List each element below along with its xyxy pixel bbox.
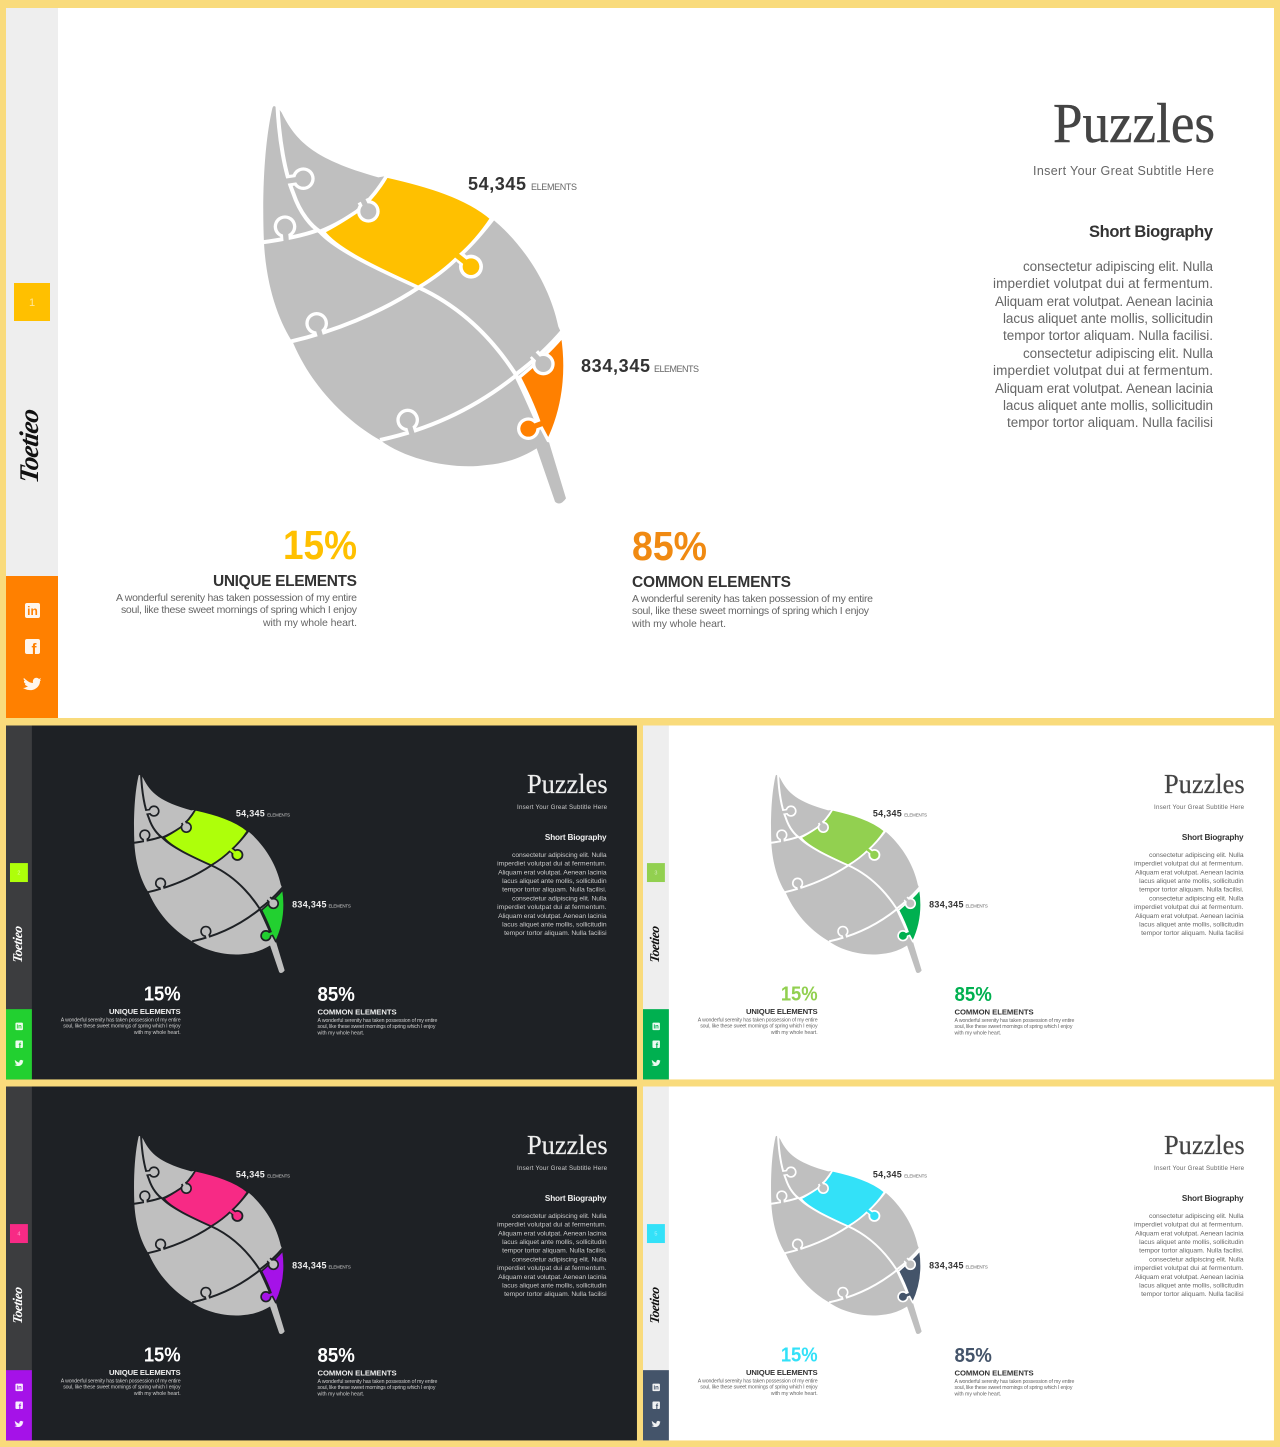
sidebar <box>643 1087 669 1440</box>
leaf piece: highlighted top <box>323 176 492 287</box>
label: 54,345 elements: 54,345 <box>236 809 265 819</box>
biography text: imperdiet volutpat dui at fermentum. <box>1134 1265 1244 1272</box>
social icons: in <box>654 1386 659 1392</box>
biography heading: Short Biography <box>1182 833 1244 842</box>
leaf piece: highlighted right <box>897 890 921 942</box>
stat: 15% unique elements: 15% <box>781 984 818 1006</box>
biography text: lacus aliquet ante mollis, sollicitudin <box>502 1239 607 1246</box>
label: 834,345 elements: 834,345 <box>581 356 650 376</box>
biography text: tempor tortor aliquam. Nulla facilisi. <box>502 886 607 894</box>
stat: 15% unique elements <box>61 984 181 1036</box>
leaf piece: highlighted top <box>164 1171 248 1226</box>
biography text: Aliquam erat volutpat. Aenean lacinia <box>995 381 1213 396</box>
sidebar: 1 <box>29 297 35 309</box>
biography text: lacus aliquet ante mollis, sollicitudin <box>502 878 607 885</box>
slide 3: white light green <box>643 726 1274 1079</box>
social icons: f <box>32 641 38 658</box>
stat: 85% common elements: with my whole heart. <box>631 618 726 630</box>
subtitle: Insert Your Great Subtitle Here <box>1154 1165 1245 1172</box>
biography text <box>1134 1213 1244 1298</box>
stat: 85% common elements: with my whole heart. <box>954 1392 1001 1398</box>
sidebar: Toetieo <box>647 1285 662 1325</box>
stat: 85% common elements: with my whole heart. <box>317 1031 364 1037</box>
stat: 15% unique elements: A wonderful serenity has taken possession of my entire <box>116 592 357 604</box>
social icons <box>651 1384 660 1427</box>
label: 834,345 elements: ELEMENTS <box>654 364 699 374</box>
biography text: Aliquam erat volutpat. Aenean lacinia <box>995 294 1213 309</box>
stat: 85% common elements: COMMON ELEMENTS <box>954 1369 1034 1378</box>
label: 834,345 elements <box>292 1260 351 1270</box>
title: Puzzles <box>527 769 608 800</box>
stat: 85% common elements: A wonderful serenity has taken possession of my entire <box>632 593 873 605</box>
stat: 15% unique elements: with my whole heart. <box>262 617 357 629</box>
biography text: consectetur adipiscing elit. Nulla <box>512 852 607 859</box>
subtitle: Insert Your Great Subtitle Here <box>517 804 608 811</box>
biography text: imperdiet volutpat dui at fermentum. <box>497 904 607 911</box>
slide 1: main yellow and orange slide <box>6 8 1274 718</box>
biography text: Aliquam erat volutpat. Aenean lacinia <box>498 870 607 877</box>
label: 54,345 elements: ELEMENTS <box>904 1174 927 1179</box>
biography text <box>497 1213 607 1298</box>
stat: 85% common elements: COMMON ELEMENTS <box>317 1008 397 1017</box>
stat: 15% unique elements: with my whole heart. <box>771 1030 818 1036</box>
title: Puzzles <box>1164 1130 1245 1161</box>
biography text: Aliquam erat volutpat. Aenean lacinia <box>1135 870 1244 877</box>
stat: 85% common elements: 85% <box>317 1345 355 1367</box>
label: 834,345 elements <box>292 899 351 909</box>
biography text: tempor tortor aliquam. Nulla facilisi <box>1141 1291 1244 1298</box>
stat: 85% common elements: COMMON ELEMENTS <box>317 1369 397 1378</box>
social icons: in <box>17 1386 22 1392</box>
stat: 85% common elements: with my whole heart. <box>317 1392 364 1398</box>
social icons: in <box>17 1025 22 1031</box>
biography text: Aliquam erat volutpat. Aenean lacinia <box>1135 913 1244 920</box>
subtitle: Insert Your Great Subtitle Here <box>1033 164 1214 178</box>
sidebar: 2 <box>17 871 20 877</box>
label: 54,345 elements: 54,345 <box>236 1170 265 1180</box>
subtitle: Insert Your Great Subtitle Here <box>517 1165 608 1172</box>
stat: 15% unique elements: 15% <box>144 984 181 1006</box>
label: 834,345 elements: 834,345 <box>292 1260 326 1270</box>
biography text <box>497 852 607 937</box>
biography text: tempor tortor aliquam. Nulla facilisi. <box>1003 328 1213 343</box>
biography text: tempor tortor aliquam. Nulla facilisi. <box>1139 1247 1244 1255</box>
label: 54,345 elements: ELEMENTS <box>904 813 927 818</box>
leaf piece: highlighted right <box>260 890 284 942</box>
label: 54,345 elements: ELEMENTS <box>267 813 290 818</box>
biography text: lacus aliquet ante mollis, sollicitudin <box>1139 921 1244 928</box>
label: 54,345 elements <box>236 809 290 819</box>
biography text: consectetur adipiscing elit. Nulla <box>1149 852 1244 859</box>
label: 834,345 elements: ELEMENTS <box>965 1264 988 1269</box>
social icons: in <box>654 1025 659 1031</box>
biography heading: Short Biography <box>545 833 607 842</box>
label: 54,345 elements: 54,345 <box>873 1170 902 1180</box>
biography text: consectetur adipiscing elit. Nulla <box>1149 1213 1244 1220</box>
stat: 15% unique elements: soul, like these sweet mornings of spring which I enjoy <box>700 1385 818 1391</box>
biography text: Aliquam erat volutpat. Aenean lacinia <box>498 1274 607 1281</box>
stat: 85% common elements: A wonderful serenity has taken possession of my entire <box>954 1018 1075 1024</box>
stat: 85% common elements: A wonderful serenity has taken possession of my entire <box>317 1018 438 1024</box>
biography text: Aliquam erat volutpat. Aenean lacinia <box>498 913 607 920</box>
stat: 15% unique elements: soul, like these sweet mornings of spring which I enjoy <box>63 1024 181 1030</box>
stat: 85% common elements: A wonderful serenity has taken possession of my entire <box>317 1379 438 1385</box>
stat: 15% unique elements: UNIQUE ELEMENTS <box>746 1368 818 1377</box>
stat: 85% common elements: soul, like these sweet mornings of spring which I enjoy <box>317 1385 436 1391</box>
sidebar: 4 <box>17 1232 20 1238</box>
social icons <box>23 603 41 690</box>
stat: 15% unique elements: A wonderful serenity has taken possession of my entire <box>61 1018 181 1024</box>
biography text: consectetur adipiscing elit. Nulla <box>512 1213 607 1220</box>
slide 2: dark lime and green <box>6 726 637 1079</box>
social icons: f <box>19 1402 22 1411</box>
biography text: lacus aliquet ante mollis, sollicitudin <box>502 1282 607 1289</box>
biography heading: Short Biography <box>1182 1194 1244 1203</box>
stat: 15% unique elements: 15% <box>283 522 357 568</box>
biography text: tempor tortor aliquam. Nulla facilisi <box>1141 930 1244 937</box>
biography text: lacus aliquet ante mollis, sollicitudin <box>502 921 607 928</box>
leaf puzzle base <box>132 774 285 973</box>
biography text: consectetur adipiscing elit. Nulla <box>512 895 607 902</box>
biography text: tempor tortor aliquam. Nulla facilisi. <box>1139 886 1244 894</box>
stat: 85% common elements: soul, like these sweet mornings of spring which I enjoy <box>317 1024 436 1030</box>
label: 54,345 elements <box>873 1170 927 1180</box>
leaf puzzle base <box>260 103 566 504</box>
label: 54,345 elements: ELEMENTS <box>267 1174 290 1179</box>
label: 834,345 elements: 834,345 <box>929 1260 963 1270</box>
stat: 85% common elements <box>954 1345 1075 1398</box>
stat: 15% unique elements: 15% <box>144 1345 181 1367</box>
stat: 85% common elements: 85% <box>954 984 992 1006</box>
stat: 15% unique elements: 15% <box>781 1345 818 1367</box>
biography text: tempor tortor aliquam. Nulla facilisi <box>504 930 607 937</box>
biography text: imperdiet volutpat dui at fermentum. <box>1134 861 1244 868</box>
label: 834,345 elements: 834,345 <box>929 899 963 909</box>
biography text: Aliquam erat volutpat. Aenean lacinia <box>1135 1231 1244 1238</box>
biography text <box>993 259 1213 430</box>
leaf piece: highlighted right <box>897 1251 921 1303</box>
stat: 85% common elements <box>317 984 438 1037</box>
biography text: imperdiet volutpat dui at fermentum. <box>497 1222 607 1229</box>
biography text: Aliquam erat volutpat. Aenean lacinia <box>498 1231 607 1238</box>
leaf puzzle base <box>132 1135 285 1334</box>
label: 54,345 elements: 54,345 <box>468 174 526 194</box>
social icons: in <box>27 604 38 618</box>
biography text: consectetur adipiscing elit. Nulla <box>1023 259 1213 274</box>
biography text: imperdiet volutpat dui at fermentum. <box>1134 1222 1244 1229</box>
stat: 15% unique elements: with my whole heart. <box>134 1391 181 1397</box>
stat: 15% unique elements: A wonderful serenity has taken possession of my entire <box>61 1379 181 1385</box>
subtitle: Insert Your Great Subtitle Here <box>1154 804 1245 811</box>
biography text: lacus aliquet ante mollis, sollicitudin <box>1139 878 1244 885</box>
label: 834,345 elements: 834,345 <box>292 899 326 909</box>
biography text: lacus aliquet ante mollis, sollicitudin <box>1003 311 1213 326</box>
sidebar: Toetieo <box>10 1285 25 1325</box>
stat: 15% unique elements <box>698 984 818 1036</box>
label: 834,345 elements <box>929 899 988 909</box>
label: 834,345 elements <box>929 1260 988 1270</box>
biography text: lacus aliquet ante mollis, sollicitudin <box>1003 398 1213 413</box>
biography text: imperdiet volutpat dui at fermentum. <box>497 1265 607 1272</box>
stat: 15% unique elements: soul, like these sweet mornings of spring which I enjoy <box>63 1385 181 1391</box>
biography text: lacus aliquet ante mollis, sollicitudin <box>1139 1239 1244 1246</box>
stat: 85% common elements: soul, like these sweet mornings of spring which I enjoy <box>954 1385 1073 1391</box>
stat: 15% unique elements <box>61 1345 181 1397</box>
stat: 15% unique elements: A wonderful serenity has taken possession of my entire <box>698 1018 818 1024</box>
biography text: consectetur adipiscing elit. Nulla <box>1149 895 1244 902</box>
label: 54,345 elements <box>468 174 577 194</box>
biography text: consectetur adipiscing elit. Nulla <box>1023 346 1213 361</box>
biography text: tempor tortor aliquam. Nulla facilisi <box>504 1291 607 1298</box>
stat: 15% unique elements: UNIQUE ELEMENTS <box>746 1007 818 1016</box>
social icons: f <box>656 1041 659 1050</box>
social icons <box>14 1384 23 1427</box>
stat: 85% common elements: COMMON ELEMENTS <box>632 574 791 591</box>
label: 54,345 elements: ELEMENTS <box>531 182 577 192</box>
biography text <box>1134 852 1244 937</box>
stat: 85% common elements <box>954 984 1075 1037</box>
biography text: lacus aliquet ante mollis, sollicitudin <box>1139 1282 1244 1289</box>
leaf puzzle base <box>769 1135 922 1334</box>
sidebar: Toetieo <box>647 924 662 964</box>
stat: 85% common elements: 85% <box>954 1345 992 1367</box>
stat: 85% common elements: soul, like these sweet mornings of spring which I enjoy <box>954 1024 1073 1030</box>
sidebar <box>6 1087 32 1440</box>
social icons <box>651 1023 660 1066</box>
biography text: imperdiet volutpat dui at fermentum. <box>497 861 607 868</box>
label: 54,345 elements <box>236 1170 290 1180</box>
stat: 15% unique elements <box>116 522 358 629</box>
biography text: imperdiet volutpat dui at fermentum. <box>993 276 1213 291</box>
leaf piece: highlighted right <box>260 1251 284 1303</box>
label: 834,345 elements: ELEMENTS <box>328 1264 351 1269</box>
stat: 85% common elements: 85% <box>632 523 707 569</box>
biography heading: Short Biography <box>545 1194 607 1203</box>
stat: 15% unique elements: UNIQUE ELEMENTS <box>213 573 357 590</box>
leaf piece: highlighted top <box>801 1171 885 1226</box>
stat: 15% unique elements: with my whole heart. <box>134 1030 181 1036</box>
social icons: f <box>19 1041 22 1050</box>
slide 4: dark pink and purple <box>6 1087 637 1440</box>
biography text: Aliquam erat volutpat. Aenean lacinia <box>1135 1274 1244 1281</box>
stat: 15% unique elements: UNIQUE ELEMENTS <box>109 1007 181 1016</box>
stat: 85% common elements <box>317 1345 438 1398</box>
stat: 15% unique elements: A wonderful serenity has taken possession of my entire <box>698 1379 818 1385</box>
biography text: imperdiet volutpat dui at fermentum. <box>993 363 1213 378</box>
slide 5: white cyan and slate <box>643 1087 1274 1440</box>
sidebar: 3 <box>654 871 657 877</box>
label: 834,345 elements <box>581 356 699 376</box>
stat: 85% common elements: with my whole heart. <box>954 1031 1001 1037</box>
leaf piece: highlighted top <box>164 810 248 865</box>
stat: 15% unique elements: soul, like these sweet mornings of spring which I enjoy <box>700 1024 818 1030</box>
biography text: tempor tortor aliquam. Nulla facilisi. <box>502 1247 607 1255</box>
leaf piece: highlighted top <box>801 810 885 865</box>
biography text: imperdiet volutpat dui at fermentum. <box>1134 904 1244 911</box>
biography heading: Short Biography <box>1089 223 1214 241</box>
stat: 15% unique elements: with my whole heart. <box>771 1391 818 1397</box>
title: Puzzles <box>1164 769 1245 800</box>
social icons <box>14 1023 23 1066</box>
biography text: consectetur adipiscing elit. Nulla <box>512 1256 607 1263</box>
sidebar: 5 <box>654 1232 657 1238</box>
social icons: f <box>656 1402 659 1411</box>
biography text: consectetur adipiscing elit. Nulla <box>1149 1256 1244 1263</box>
leaf puzzle base <box>769 774 922 973</box>
stat: 15% unique elements: UNIQUE ELEMENTS <box>109 1368 181 1377</box>
stat: 85% common elements: COMMON ELEMENTS <box>954 1008 1034 1017</box>
sidebar: Toetieo <box>10 924 25 964</box>
sidebar <box>6 8 58 718</box>
title: Puzzles <box>1053 93 1215 155</box>
sidebar: Toetieo <box>14 407 44 485</box>
stat: 15% unique elements: soul, like these sweet mornings of spring which I enjoy <box>121 604 358 616</box>
stat: 85% common elements <box>631 523 873 630</box>
sidebar <box>6 726 32 1079</box>
label: 834,345 elements: ELEMENTS <box>965 903 988 908</box>
label: 834,345 elements: ELEMENTS <box>328 903 351 908</box>
stat: 85% common elements: soul, like these sweet mornings of spring which I enjoy <box>632 605 870 617</box>
stat: 15% unique elements <box>698 1345 818 1397</box>
leaf piece: highlighted right <box>517 336 565 441</box>
label: 54,345 elements <box>873 809 927 819</box>
biography text: tempor tortor aliquam. Nulla facilisi <box>1007 415 1213 430</box>
stat: 85% common elements: 85% <box>317 984 355 1006</box>
sidebar <box>643 726 669 1079</box>
label: 54,345 elements: 54,345 <box>873 809 902 819</box>
title: Puzzles <box>527 1130 608 1161</box>
stat: 85% common elements: A wonderful serenity has taken possession of my entire <box>954 1379 1075 1385</box>
